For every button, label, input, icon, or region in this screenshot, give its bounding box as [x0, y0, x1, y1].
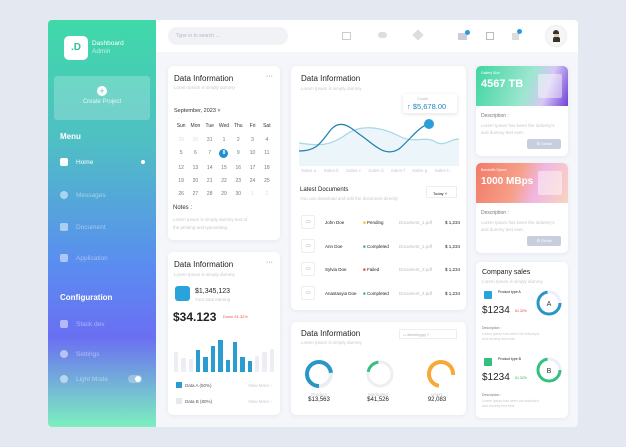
- panel: bandwidth card: [476, 163, 568, 253]
- panel: company sales: Description :: [482, 393, 501, 397]
- panel: earnings bars: [168, 252, 280, 415]
- panel: calendar: Thu: [234, 123, 243, 129]
- panel: calendar: 24: [250, 178, 255, 184]
- panel: gallery size card: and dummy text ever.: [481, 130, 524, 135]
- panel: line chart and documents: Lorem Ipsum is simply dummy: [301, 86, 362, 91]
- line chart: [299, 119, 459, 166]
- panel: calendar: 6: [194, 150, 197, 156]
- panel: calendar: 1: [223, 137, 225, 143]
- panel: company sales: Product type A: [498, 290, 521, 294]
- bar chart: [174, 340, 274, 372]
- document rows: ▭: [306, 290, 310, 296]
- panel: donuts: [291, 322, 466, 415]
- panel: company sales: and dummy text ever.: [482, 337, 515, 341]
- panel: earnings bars: Data B (80%): [185, 399, 212, 404]
- panel: calendar: 18: [264, 165, 270, 171]
- panel: donuts: $13,563: [308, 397, 330, 403]
- panel: donuts: Data Information: [301, 329, 360, 338]
- panel: donuts: ▭ dd/mm/yyyy ˅: [403, 333, 429, 337]
- document rows: [301, 215, 460, 300]
- panel: calendar: 8: [223, 150, 225, 156]
- panel: calendar: 2: [265, 191, 268, 197]
- callout: growth: Growth: [417, 97, 428, 101]
- panel: calendar: 19: [178, 178, 184, 184]
- panel: calendar: Sat: [263, 123, 271, 129]
- panel: calendar: Wed: [219, 123, 229, 129]
- panel: calendar: 29: [178, 137, 184, 143]
- panel: calendar: 26: [178, 191, 184, 197]
- menu: document: [60, 223, 106, 231]
- document rows: Ann Doe: [325, 244, 343, 248]
- panel: bandwidth card: Bandwith Speed: [481, 168, 506, 172]
- panel: donuts: Product: [311, 392, 327, 397]
- top icons: [342, 32, 351, 40]
- panel: line chart and documents: [291, 66, 466, 310]
- panel: calendar: 9: [237, 150, 240, 156]
- document rows: $ 1,234: [445, 290, 460, 296]
- panel: calendar: 29: [221, 191, 227, 197]
- document rows: $ 1,234: [445, 244, 460, 248]
- panel: bandwidth card: Description :: [481, 210, 509, 216]
- callout: growth: [403, 94, 457, 113]
- document rows: Document_1.pdf: [399, 220, 432, 225]
- panel: calendar: 16: [236, 165, 241, 171]
- document rows: ▭: [306, 219, 310, 225]
- sidebar: [48, 20, 156, 427]
- panel: company sales: 61.32%: [515, 309, 527, 313]
- panel: calendar: 1: [251, 191, 254, 197]
- document rows: ▭: [306, 266, 310, 272]
- panel: calendar: Mon: [191, 123, 200, 129]
- panel: company sales: A: [547, 301, 552, 308]
- panel: company sales: $1234: [482, 305, 510, 316]
- create project: [54, 76, 150, 120]
- panel: earnings bars: $1,345,123: [195, 288, 230, 295]
- panel: donuts: $41,526: [367, 397, 389, 403]
- panel: calendar: 31: [207, 137, 212, 143]
- panel: calendar: 3: [251, 137, 254, 143]
- panel: company sales: Lorem Ipsum has been the industry's: [482, 399, 539, 403]
- panel: calendar: Sun: [177, 123, 186, 129]
- panel: bandwidth card: Lorem Ipsum has been the industry's: [481, 220, 555, 225]
- panel: calendar: 28: [207, 191, 212, 197]
- panel: calendar: 4: [265, 137, 268, 143]
- panel: line chart and documents: You can download and edit the document directly: [300, 196, 398, 201]
- panel: line chart and documents: Today ˅: [433, 191, 447, 196]
- document rows: Document_4.pdf: [399, 290, 432, 296]
- menu: messages: [60, 191, 106, 199]
- panel: calendar: 7: [208, 150, 211, 156]
- document rows: John Doe: [325, 220, 344, 225]
- panel: calendar: 13: [193, 165, 198, 171]
- panel: calendar: 10: [250, 150, 255, 156]
- document rows: Document_2.pdf: [399, 244, 432, 248]
- document rows: Document_3.pdf: [399, 267, 432, 272]
- menu: home: [60, 158, 145, 166]
- panel: calendar: Fri: [250, 123, 255, 129]
- panel: line chart and documents: Sales·a Sales·b Sales·c Sales·d Sales·f Sales·g Sales·h: [301, 168, 450, 173]
- panel: calendar: 21: [207, 178, 212, 184]
- panel: company sales: and dummy text ever.: [482, 404, 515, 408]
- panel: earnings bars: Data A (50%): [185, 383, 212, 388]
- panel: earnings bars: Down 61.32%: [223, 314, 248, 319]
- panel: calendar: 14: [207, 165, 212, 171]
- panel: calendar: Notes :: [173, 205, 192, 211]
- search: [168, 27, 288, 45]
- panel: calendar: Data Information: [174, 74, 233, 83]
- panel: calendar: 20: [193, 178, 198, 184]
- create project: Create Project: [83, 99, 121, 105]
- panel: donuts: Users: [431, 392, 443, 397]
- panel: line chart and documents: Latest Documents: [300, 187, 348, 193]
- brand text: [92, 40, 124, 55]
- panel: donuts: 92,083: [428, 397, 446, 403]
- panel: calendar: 11: [264, 150, 269, 156]
- menu: application: Application: [76, 254, 108, 262]
- panel: calendar: 22: [221, 178, 227, 184]
- document rows: $ 1,234: [445, 267, 460, 272]
- callout: growth: ↑ $5,678.00: [407, 102, 446, 111]
- brand text: Admin: [92, 48, 110, 55]
- menu: document: Document: [76, 224, 106, 230]
- panel: gallery size card: Description :: [481, 113, 509, 119]
- panel: calendar: 23: [236, 178, 241, 184]
- menu: settings: Settings: [76, 350, 100, 358]
- document rows: ■ Completed: [363, 244, 389, 248]
- document rows: Anastasyia Doe: [325, 290, 357, 296]
- document rows: $ 1,234: [445, 220, 460, 225]
- menu: home: Home: [76, 158, 93, 166]
- panel: earnings bars: View More ›: [248, 399, 272, 404]
- panel: gallery size card: Gallery Size: [481, 71, 500, 75]
- panel: company sales: $1234: [482, 372, 510, 383]
- menu: stack dev: [60, 320, 105, 328]
- panel: calendar: 12: [178, 165, 184, 171]
- panel: calendar: ···: [266, 73, 273, 80]
- configuration heading: Configuration: [60, 293, 112, 302]
- panel: calendar: the printing and typesetting.: [173, 225, 228, 230]
- menu: messages: Messages: [76, 192, 106, 198]
- panel: gallery size card: ⚙ Detail: [537, 141, 551, 146]
- menu: settings: [60, 350, 100, 358]
- panel: company sales: Company sales: [482, 269, 530, 276]
- menu: application: [60, 254, 108, 262]
- panel: calendar: Lorem Ipsum is simply dummy: [174, 85, 235, 90]
- panel: calendar: 15: [221, 165, 227, 171]
- panel: calendar: [168, 66, 280, 240]
- panel: earnings bars: View More ›: [248, 383, 272, 388]
- menu: light mode: Light Mode: [76, 376, 108, 382]
- create project: +: [99, 86, 105, 96]
- dashboard frame: [48, 20, 578, 427]
- menu heading: Menu: [60, 132, 81, 141]
- panel: line chart and documents: Data Information: [301, 74, 360, 83]
- panel: company sales: B: [547, 368, 552, 375]
- panel: calendar: 17: [250, 165, 255, 171]
- logo: .D: [71, 42, 81, 53]
- menu: light mode: [60, 375, 142, 383]
- panel: company sales: Lorem Ipsum has been the industry's: [482, 332, 539, 336]
- document rows: ▭: [306, 242, 310, 248]
- logo: [64, 36, 88, 60]
- avatar: [546, 26, 566, 46]
- panel: gallery size card: 4567 TB: [481, 78, 523, 90]
- search: Type in to search ...: [176, 33, 220, 39]
- panel: calendar: 25: [264, 178, 270, 184]
- panel: calendar: 30: [193, 137, 198, 143]
- document rows: ■ Completed: [363, 290, 389, 296]
- panel: earnings bars: ···: [266, 259, 273, 266]
- panel: calendar: 27: [193, 191, 198, 197]
- brand text: Dashboard: [92, 40, 124, 47]
- panel: company sales: 61.32%: [515, 376, 527, 380]
- top bar: [156, 20, 578, 52]
- panel: calendar: September, 2023 ˅: [174, 108, 221, 114]
- panel: bandwidth card: and dummy text ever.: [481, 227, 524, 232]
- document rows: Sylvia Doe: [325, 267, 347, 272]
- panel: bandwidth card: ⚙ Detail: [537, 238, 551, 243]
- panel: earnings bars: Lorem Ipsum is simply dummy: [174, 272, 235, 277]
- panel: company sales: [476, 262, 568, 418]
- panel: earnings bars: Data Information: [174, 260, 233, 269]
- panel: calendar: Lorem Ipsum is simply dummy text of: [173, 217, 247, 222]
- panel: calendar: 30: [236, 191, 241, 197]
- panel: company sales: Description :: [482, 326, 501, 330]
- panel: company sales: Lorem Ipsum is simply dummy: [482, 279, 543, 284]
- panel: calendar: Tue: [205, 123, 214, 129]
- panel: calendar: 5: [180, 150, 183, 156]
- panel: earnings bars: $34.123: [173, 310, 216, 324]
- panel: calendar: 2: [237, 137, 240, 143]
- panel: gallery size card: [476, 66, 568, 156]
- panel: earnings bars: Your total earning: [195, 297, 230, 302]
- panel: company sales: Product type B: [498, 357, 521, 361]
- menu: stack dev: Stack dev: [76, 320, 105, 328]
- panel: donuts: Marketing: [368, 392, 388, 397]
- document rows: ■ Pending: [363, 220, 383, 225]
- panel: donuts: Lorem Ipsum is simply dummy: [301, 340, 362, 345]
- panel: bandwidth card: 1000 MBps: [481, 176, 533, 187]
- document rows: ■ Failed: [363, 267, 379, 272]
- panel: gallery size card: Lorem Ipsum has been the industry's: [481, 123, 555, 128]
